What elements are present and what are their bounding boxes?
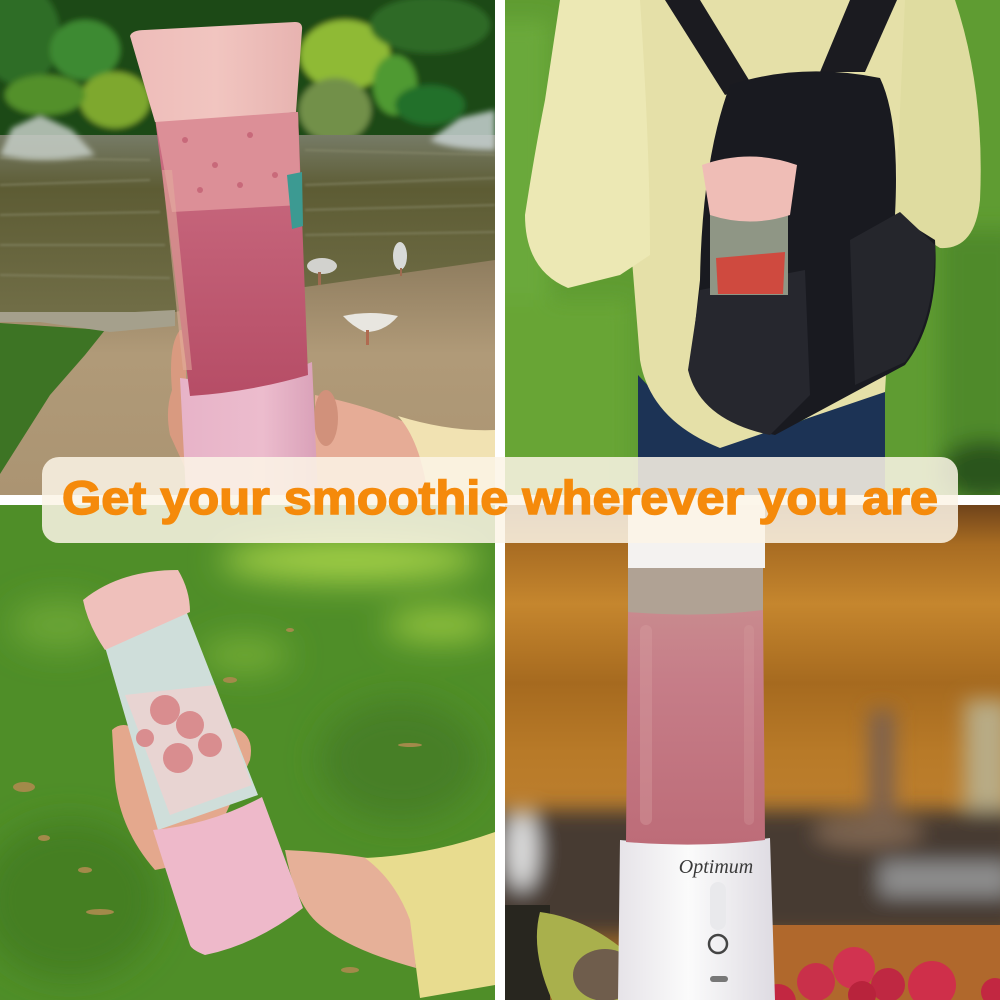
water ripples	[0, 150, 495, 278]
hand	[112, 725, 251, 870]
fountain right	[430, 110, 495, 150]
charging port	[710, 976, 728, 982]
shoulder strap right	[820, 0, 897, 72]
blender lid	[130, 22, 302, 122]
white blender cap	[628, 505, 765, 568]
grass patch	[0, 323, 105, 474]
brand name: Optimum	[679, 856, 753, 878]
seagull 3	[343, 313, 398, 345]
blender jar in pocket	[710, 215, 788, 295]
shirt torso	[632, 0, 905, 448]
trousers	[638, 375, 885, 495]
panel: blender held in hand on the lawn	[0, 505, 495, 1000]
wooden board	[770, 925, 1000, 1000]
blender jar	[103, 608, 258, 830]
strawberries	[136, 695, 222, 773]
sandy path	[68, 260, 495, 376]
blender lid	[83, 570, 190, 650]
panel: blender at the park pond	[0, 0, 530, 495]
blender jar with smoothie	[626, 567, 765, 845]
fountain left	[0, 115, 95, 160]
shore stones	[0, 310, 175, 332]
left sleeve	[525, 0, 650, 288]
fallen leaves	[13, 628, 422, 973]
backpack	[688, 71, 936, 435]
trees behind the pond	[0, 0, 495, 135]
panel: blender in a backpack pocket	[480, 0, 1000, 520]
blender jar with smoothie	[155, 112, 308, 396]
grass shading	[505, 23, 1000, 495]
arm	[285, 850, 416, 968]
arm and sleeve	[168, 330, 495, 495]
blender base	[180, 362, 318, 495]
blender lid	[702, 156, 797, 222]
headline: Get your smoothie wherever you are	[62, 471, 938, 524]
sleeve	[365, 832, 495, 998]
raspberries	[760, 947, 1000, 1000]
shoulder strap left	[665, 0, 752, 95]
blurred kitchen background	[480, 700, 1000, 935]
right sleeve	[930, 0, 981, 248]
seagull 1	[307, 258, 337, 285]
seagull 2	[393, 242, 407, 276]
avocado	[505, 905, 660, 1000]
panel: blender on kitchen counter	[480, 505, 1000, 1000]
banner with headline	[42, 457, 958, 543]
pond water	[0, 135, 495, 315]
white blender base	[618, 838, 775, 1000]
blender base	[153, 797, 303, 955]
power button	[709, 935, 727, 953]
indicator lights	[710, 882, 726, 930]
sunlit lawn patches	[0, 538, 495, 980]
smoothie speckles	[182, 132, 278, 193]
